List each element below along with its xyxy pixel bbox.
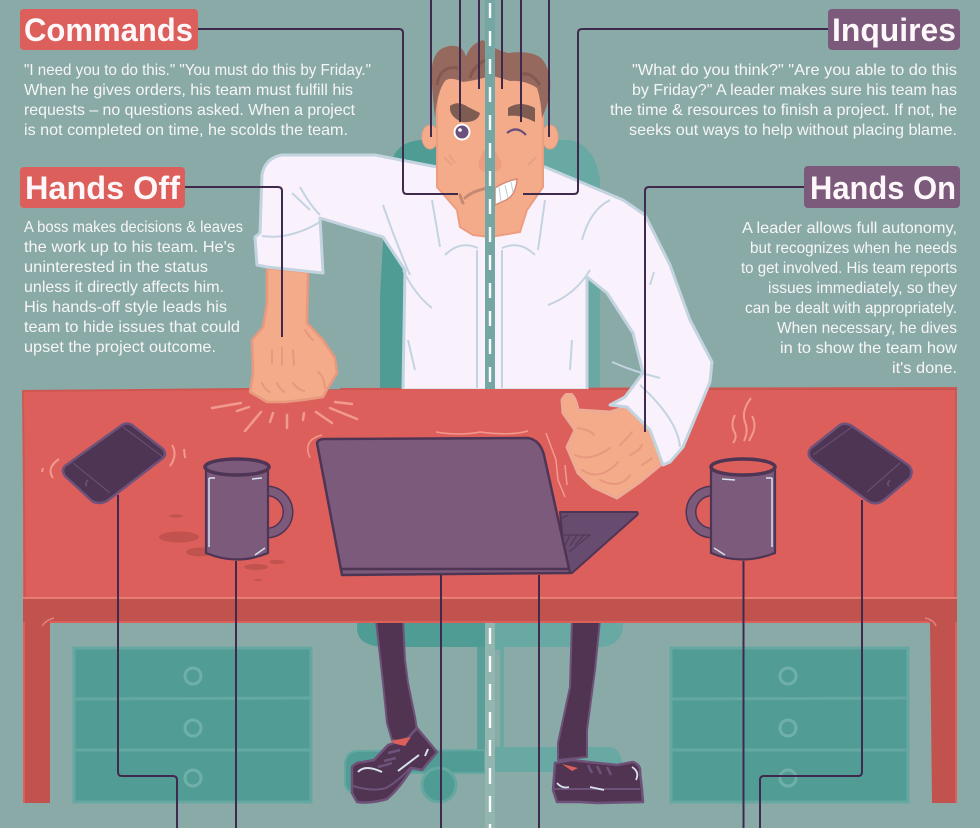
panel: hands off [20, 167, 247, 356]
left phone [42, 424, 185, 503]
chair back [380, 140, 600, 390]
text: hands on: but recognizes when he needs [750, 240, 957, 257]
text: hands off: His hands-off style leads his [24, 299, 227, 316]
coffee spills [159, 514, 285, 581]
text: hands off: upset the project outcome. [24, 339, 216, 356]
connector lines [118, 0, 862, 828]
heading badge: hands on: Hands On [810, 170, 956, 206]
grin [495, 179, 517, 205]
text: hands on: A leader allows full autonomy, [742, 220, 957, 237]
text: hands off: uninterested in the status [24, 259, 208, 276]
panel: inquires [610, 9, 961, 139]
text: hands off: the work up to his team. He's [24, 239, 235, 256]
text: hands on: issues immediately, so they [768, 280, 957, 297]
man: head [422, 40, 558, 237]
laptop shake marks [308, 431, 567, 497]
text: inquires: by Friday?" A leader makes sure his team has [632, 82, 957, 99]
text: hands on: When necessary, he dives [777, 320, 957, 337]
left eye [454, 124, 470, 140]
text: commands: is not completed on time, he scolds the team. [24, 122, 348, 139]
panel: hands on [741, 166, 961, 377]
laptop [317, 438, 638, 575]
text: inquires: seeks out ways to help without placing blame. [629, 122, 957, 139]
hair [431, 40, 550, 118]
steam [732, 398, 754, 443]
wink [507, 129, 526, 135]
text: inquires: the time & resources to finish a project. If not, he [610, 102, 957, 119]
fist impact marks [212, 402, 357, 431]
frown [460, 188, 488, 203]
text: commands: When he gives orders, his team must fulfill his [24, 82, 353, 99]
cheek marks [444, 155, 536, 165]
right mug [691, 398, 775, 560]
text: hands on: can be dealt with appropriately. [745, 300, 957, 317]
centre strip below desk [485, 622, 495, 828]
text: commands: requests – no questions asked. When a project [24, 102, 356, 119]
centre divider above desk [485, 0, 495, 389]
heading badge: inquires: Inquires [832, 12, 956, 48]
text: hands off: A boss makes decisions & leaves [24, 219, 243, 236]
text: hands on: in to show the team how [780, 340, 957, 357]
text: hands off: unless it directly affects him. [24, 279, 224, 296]
text: hands off: team to hide issues that could [24, 319, 240, 336]
brows [450, 103, 535, 122]
text: commands: "I need you to do this." "You must do this by Friday." [24, 62, 371, 79]
text: hands on: it's done. [892, 360, 957, 377]
drawers right [671, 648, 908, 802]
left forearm and fist [250, 268, 337, 402]
ears [422, 125, 438, 149]
panel: commands [20, 9, 375, 139]
drawers left [74, 648, 311, 802]
shirt [255, 155, 712, 465]
nose [478, 150, 502, 172]
heading badge: commands: Commands [24, 12, 193, 48]
chair base [345, 620, 623, 802]
text: inquires: "What do you think?" "Are you able to do this [632, 62, 957, 79]
face [437, 75, 543, 237]
text: hands on: to get involved. His team reports [741, 260, 957, 277]
right hand thumbs up [562, 394, 667, 498]
table [23, 388, 957, 803]
legs and shoes [352, 620, 643, 803]
heading badge: hands off: Hands Off [25, 170, 180, 206]
right phone [809, 424, 912, 503]
left mug [159, 459, 288, 581]
